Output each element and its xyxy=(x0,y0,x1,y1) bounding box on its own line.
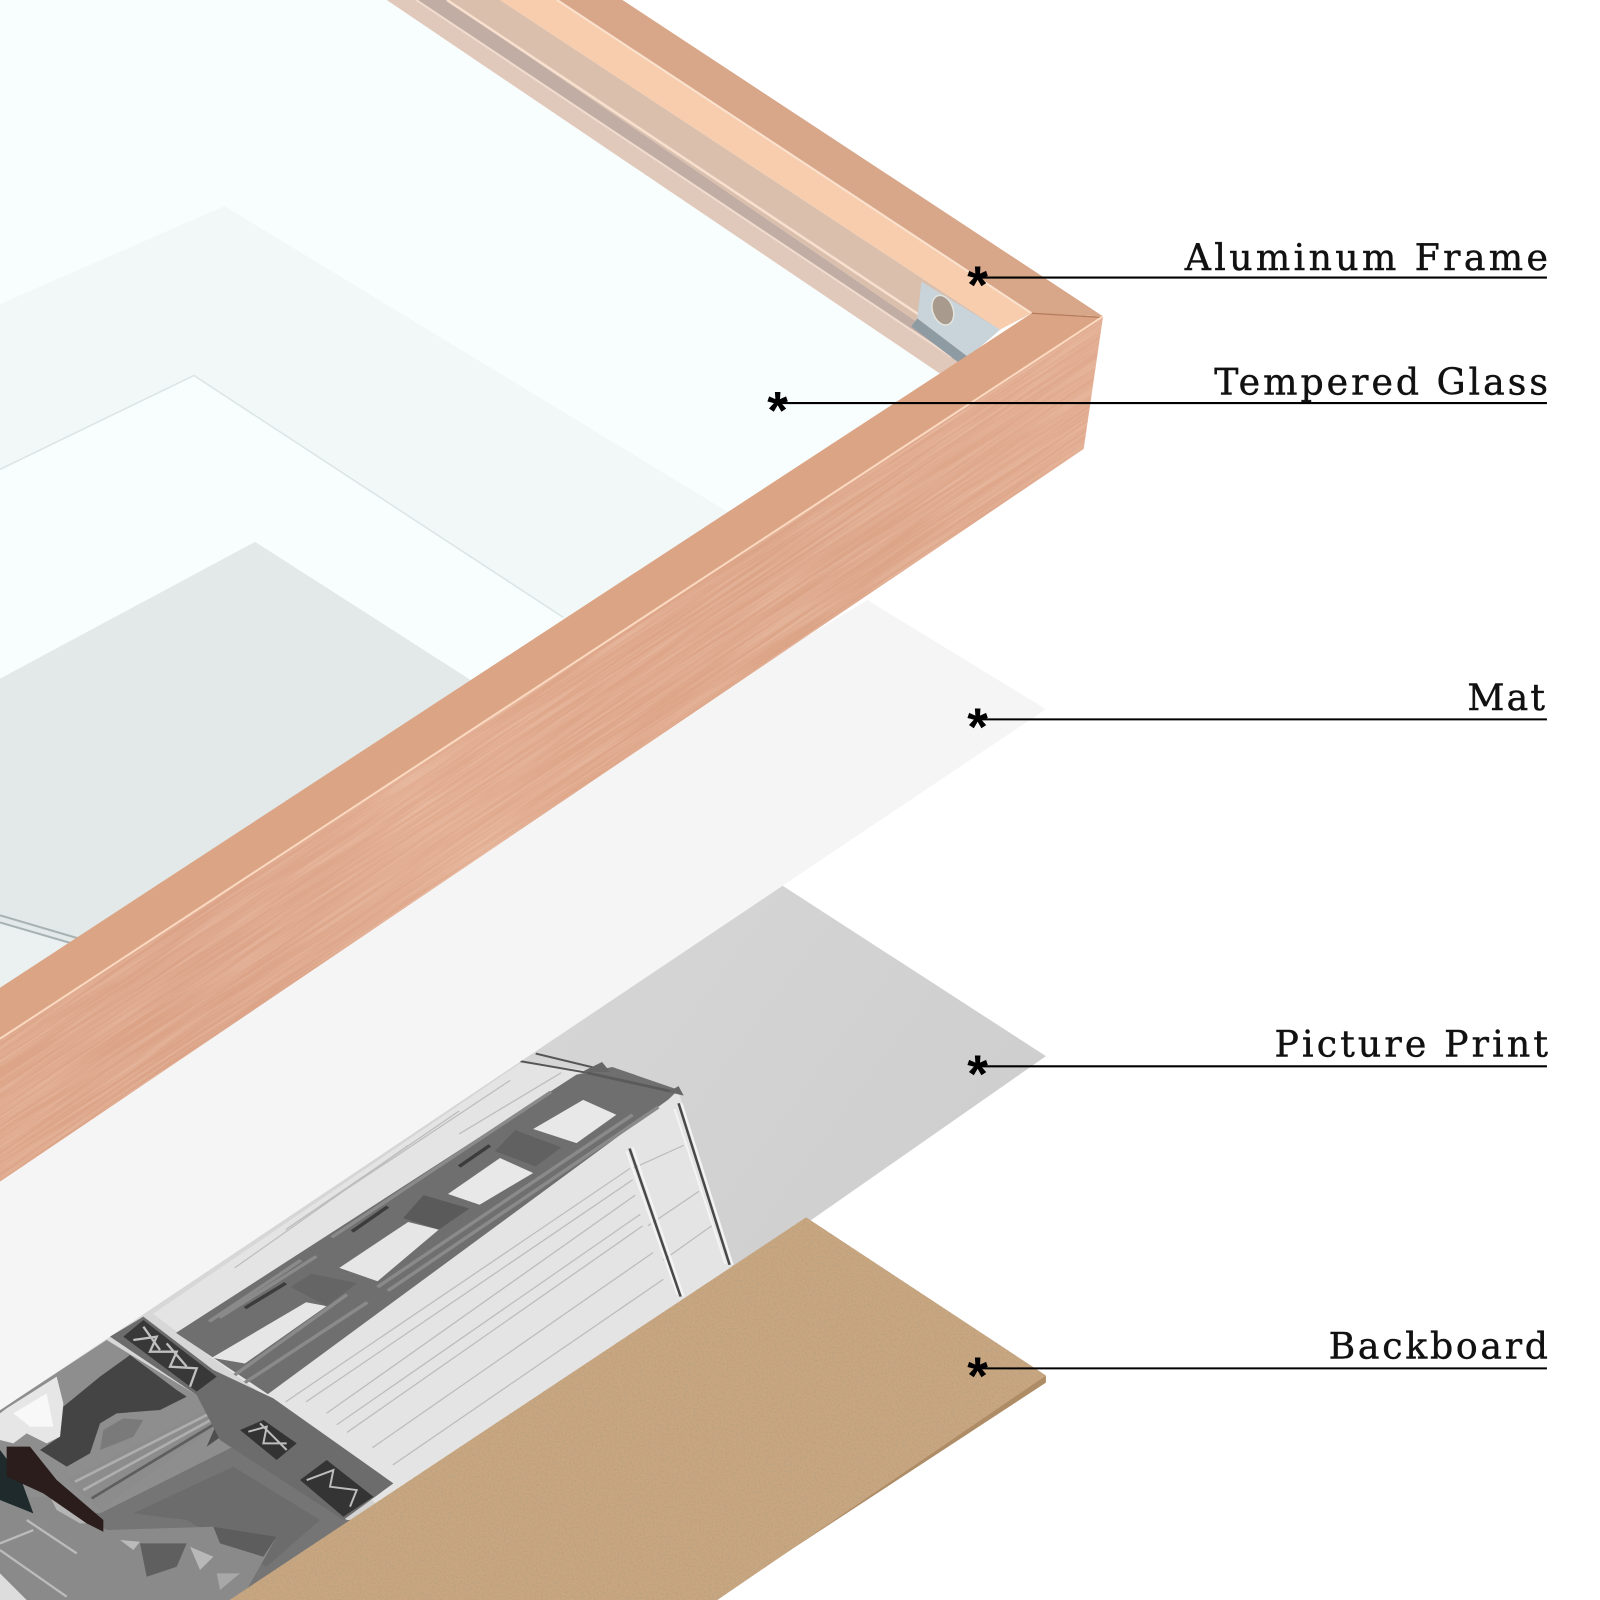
mat seen through glass xyxy=(0,206,776,673)
rear rail peach face xyxy=(500,0,1032,330)
front rail top face xyxy=(0,313,1103,1039)
label: tempered glass xyxy=(767,360,1548,441)
layer: picture print xyxy=(0,886,1046,1600)
bridge lower section xyxy=(0,1317,400,1600)
rear rail beige xyxy=(447,0,1000,357)
front rail side face xyxy=(0,318,1103,1182)
label: tempered glass: Tempered Glass xyxy=(1214,360,1548,403)
rear rail top face xyxy=(557,0,1103,316)
label: picture print: * xyxy=(967,1045,988,1104)
lower tower post xyxy=(67,1408,220,1510)
pole and dark foliage xyxy=(0,1450,33,1513)
print sky xyxy=(0,886,1046,1600)
label: picture print xyxy=(967,1023,1548,1104)
layer: backboard xyxy=(230,1214,1056,1600)
highlight edge xyxy=(0,316,1103,1039)
label: backboard xyxy=(967,1325,1548,1406)
layer: mat xyxy=(0,600,1046,1410)
label: backboard: Backboard xyxy=(1329,1325,1548,1368)
cloud xyxy=(0,1377,63,1443)
label: picture print: Picture Print xyxy=(1274,1023,1548,1066)
label: mat xyxy=(967,676,1547,757)
ground xyxy=(0,1433,400,1600)
print seen through glass xyxy=(0,542,480,1000)
label: aluminum frame: Aluminum Frame xyxy=(1184,236,1548,279)
dark hill xyxy=(40,1355,187,1467)
rear rail inner lip xyxy=(387,0,958,373)
tower xyxy=(176,1067,679,1394)
deck truss xyxy=(110,1317,393,1520)
layer: tempered glass xyxy=(0,0,940,1000)
rear rail groove xyxy=(416,0,968,362)
label: aluminum frame: * xyxy=(967,256,988,315)
golden gate bridge photo xyxy=(153,1054,733,1536)
bridge cables seen through glass xyxy=(0,915,80,995)
label: tempered glass: * xyxy=(767,382,788,441)
label: aluminum frame xyxy=(967,236,1548,315)
label: mat: * xyxy=(967,698,988,757)
foreground xyxy=(0,1497,277,1600)
label: backboard: * xyxy=(967,1347,988,1406)
layer: aluminum frame xyxy=(0,0,1104,1182)
label: mat: Mat xyxy=(1467,676,1545,719)
corner bracket xyxy=(911,282,1000,362)
upper-left distant hill xyxy=(0,1340,233,1513)
mat window outline xyxy=(0,376,563,617)
